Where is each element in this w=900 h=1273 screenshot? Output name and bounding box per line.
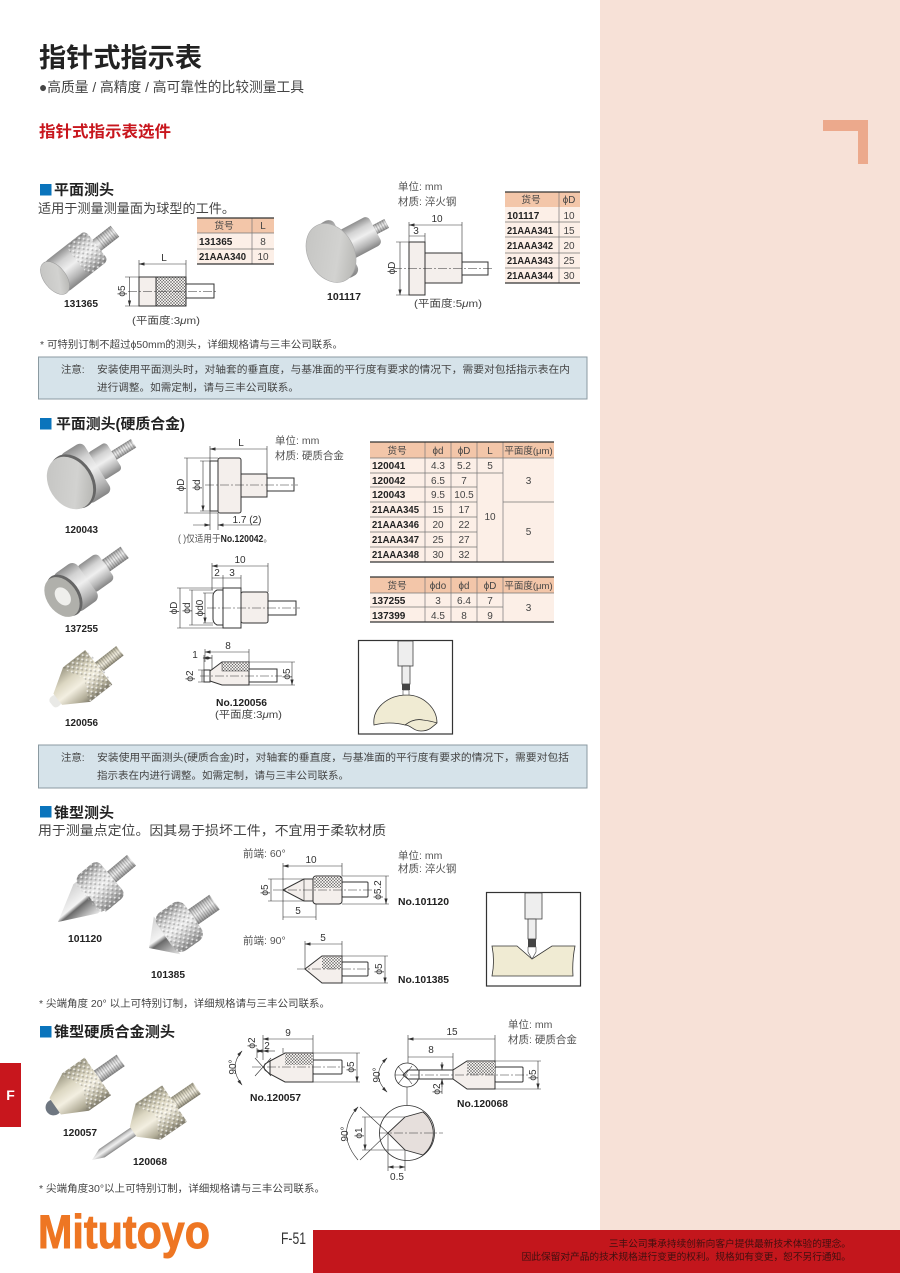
diagram: 120056: ϕ5: [282, 668, 293, 680]
diagram: 137255: 2: [214, 568, 220, 579]
table: 137255: 7: [487, 596, 493, 607]
table: 137255: 平面度(μm): [504, 580, 553, 592]
diagram: 120043: 1.7 (2): [233, 515, 261, 526]
diagram: 101120: 5: [295, 906, 301, 917]
table: carbide flat: 25: [432, 535, 444, 546]
table: 137255: 8: [461, 611, 467, 622]
table: carbide flat: 9.5: [431, 490, 445, 501]
diagram: 101117: [387, 214, 493, 295]
diagram: 120056: ϕ2: [185, 670, 196, 682]
diagram: 120068: ϕ2: [432, 1083, 443, 1095]
diagram: 101117: 10: [431, 214, 443, 225]
diagram: 137255: 10: [234, 555, 246, 566]
table: carbide flat: [370, 442, 554, 562]
unit and material carbide: [275, 434, 344, 462]
diagram: 120056: [185, 641, 295, 685]
table: carbide flat: 5: [526, 527, 532, 538]
table: carbide flat: 10.5: [454, 490, 474, 501]
diagram: tip detail: 90°: [340, 1126, 351, 1142]
unit and material carbide: [508, 1018, 577, 1046]
unit and material: 材质: 淬火钢: [398, 195, 456, 208]
table: 137255: 货号: [387, 579, 407, 592]
page number: F-51: [281, 1229, 306, 1248]
table: 131365: 131365: [199, 237, 233, 248]
table: 101117: 21AAA341: [507, 226, 553, 237]
table: 131365: 21AAA340: [199, 252, 246, 263]
footer band: 三丰公司秉承持续创新向客户提供最新技术体验的理念。: [609, 1237, 851, 1250]
diagram: 120057: 90°: [228, 1059, 239, 1075]
label: 101385: 101385: [151, 970, 185, 981]
diagram: tip detail: 0.5: [390, 1172, 404, 1183]
table: carbide flat: 10: [484, 512, 496, 523]
diagram: 131365: [117, 253, 218, 306]
diagram: 120057: 9: [285, 1028, 291, 1039]
photo: 101120: [43, 843, 146, 940]
label: 101117: 101117: [327, 292, 361, 303]
diagram: 120057: [228, 1028, 360, 1085]
title: 指针式指示表: [39, 43, 202, 73]
note box: 进行调整。如需定制，请与三丰公司联系。: [97, 381, 299, 394]
table: carbide flat: 20: [432, 520, 444, 531]
table: carbide flat: ϕD: [458, 446, 470, 457]
diagram: 120068: ϕ5: [528, 1069, 539, 1081]
flatness note 5um: (平面度:5 μm): [414, 297, 482, 310]
unit and material steel: [398, 849, 456, 875]
diagram: 137255: ϕd: [182, 602, 193, 614]
table: carbide flat: 120042: [372, 476, 406, 487]
label: No.120068: No.120068: [457, 1099, 508, 1110]
table: carbide flat: 22: [458, 520, 470, 531]
label: No.120057: No.120057: [250, 1093, 301, 1104]
corner marker: [823, 120, 868, 164]
label: 120057: 120057: [63, 1128, 97, 1139]
label: 101120: 101120: [68, 934, 102, 945]
diagram: 120057: ϕ5: [346, 1061, 357, 1073]
flatness note: (平面度:3 μm): [215, 708, 282, 721]
table: 101117: 20: [563, 241, 575, 252]
footer logo: Mitutoyo: [38, 1205, 210, 1258]
unit and material carbide: 单位: mm: [275, 434, 320, 447]
table: carbide flat: 32: [458, 550, 470, 561]
note box 2: 注意:: [61, 751, 85, 764]
note box: 注意:: [61, 363, 85, 376]
photo: 120043: [37, 419, 149, 519]
panel: flat contact points: [35, 180, 587, 399]
diagram: 101117: ϕD: [387, 262, 398, 274]
table: 101117: 货号: [521, 193, 541, 206]
illustration: contact on sphere: [358, 640, 452, 734]
table: carbide flat: 6.5: [431, 476, 445, 487]
diagram: 120068: 15: [446, 1027, 458, 1038]
diagram: 101385: 5: [320, 933, 326, 944]
note box 2: 指示表在内进行调整。如需定制，请与三丰公司联系。: [97, 769, 349, 782]
note box: 安装使用平面测头时，对轴套的垂直度，与基准面的平行度有要求的情况下，需要对包括指示表在内: [97, 363, 570, 376]
diagram: 101120: [260, 855, 389, 920]
note box 2: [38, 745, 587, 788]
diagram: 137255: [169, 555, 300, 628]
diagram: 101385: ϕ5: [374, 963, 385, 975]
table: 137255: 6.4: [457, 596, 471, 607]
photo: 131365: [35, 216, 127, 300]
table: 101117: 21AAA344: [507, 271, 553, 282]
photo: 137255: [36, 534, 138, 624]
diagram: 120068: 8: [428, 1045, 434, 1056]
table: 137255: 4.5: [431, 611, 445, 622]
table: carbide flat: 7: [461, 476, 467, 487]
subtitle: ●高质量 / 高精度 / 高可靠性的比较测量工具: [39, 79, 304, 95]
side tab F: F: [6, 1087, 15, 1103]
photo: 120068: [80, 1070, 209, 1178]
heading: cone: 锥型测头: [54, 805, 114, 822]
diagram: 120068: 90°: [372, 1067, 383, 1083]
label: No.120056: No.120056: [216, 698, 267, 709]
table: 101117: ϕD: [563, 195, 575, 206]
diagram: 120057: ϕ2: [247, 1037, 258, 1049]
table: carbide flat: 21AAA347: [372, 535, 419, 546]
label: 131365: 131365: [64, 299, 98, 310]
diagram: 120056: 1: [192, 650, 198, 661]
diagram: 120043: [176, 438, 298, 530]
label: No.101385: No.101385: [398, 975, 449, 986]
footnote: * 尖端角度30°以上可特别订制，详细规格请与三丰公司联系。: [39, 1182, 325, 1195]
label: 120056: 120056: [65, 718, 98, 729]
table: 137255: ϕd: [459, 581, 469, 592]
photo: 120057: [34, 1042, 134, 1131]
table: 137255: 9: [487, 611, 493, 622]
unit and material steel: 单位: mm: [398, 849, 443, 862]
heading: carbide flat: 平面测头(硬质合金): [56, 415, 185, 433]
table: 131365: 8: [260, 237, 266, 248]
section heading: options: 指针式指示表选件: [39, 123, 171, 141]
diagram: 137255: 3: [229, 568, 235, 579]
footnote: * 可特别订制不超过ϕ50mm的测头，详细规格请与三丰公司联系。: [40, 338, 343, 351]
side tab F: [0, 1063, 21, 1127]
table: 131365: L: [260, 221, 266, 232]
label: 120043: 120043: [65, 525, 98, 536]
right page background panel: [600, 0, 900, 1231]
unit and material: 单位: mm: [398, 180, 443, 193]
caption: 90 degree: 前端: 90°: [243, 934, 286, 947]
label: 137255: 137255: [65, 624, 98, 635]
flatness note 3um: (平面度:3 μm): [132, 314, 200, 327]
table: carbide flat: 4.3: [431, 461, 445, 472]
diagram: tip detail: ϕ1: [354, 1127, 365, 1139]
diagram: 101117: 3: [413, 226, 419, 237]
table: 131365: [197, 218, 274, 264]
table: carbide flat: 21AAA348: [372, 550, 419, 561]
panel: cone contact points: [38, 805, 580, 1010]
photo: 120056: [38, 633, 134, 722]
unit and material carbide: 材质: 硬质合金: [275, 449, 344, 462]
table: carbide flat: L: [487, 446, 493, 457]
table: carbide flat: 5.2: [457, 461, 471, 472]
table: carbide flat: 5: [487, 461, 493, 472]
panel: cone carbide contact points: [34, 1018, 577, 1195]
table: 101117: 21AAA342: [507, 241, 553, 252]
diagram: 101120: ϕ5.2: [373, 880, 384, 900]
unit and material: [398, 180, 456, 208]
photo: 101117: [296, 196, 401, 291]
table: carbide flat: 平面度(μm): [504, 445, 553, 457]
note box 2: 安装使用平面测头(硬质合金)时，对轴套的垂直度，与基准面的平行度有要求的情况下，需要对包括: [97, 751, 569, 764]
table: 137255: 3: [526, 603, 532, 614]
table: carbide flat: 17: [458, 505, 470, 516]
illustration: point in groove: [486, 892, 580, 986]
diagram: 120057: 2: [264, 1041, 270, 1052]
table: carbide flat: 120041: [372, 461, 406, 472]
table: 101117: 30: [563, 271, 575, 282]
note: parenthesis: ( )仅适用于No.120042。: [178, 533, 272, 545]
table: 101117: 21AAA343: [507, 256, 553, 267]
table: carbide flat: ϕd: [433, 446, 443, 457]
table: carbide flat: 120043: [372, 490, 406, 501]
label: 120068: 120068: [133, 1157, 167, 1168]
note box: [38, 357, 587, 399]
table: 137255: ϕD: [484, 581, 496, 592]
diagram: 120043: L: [238, 438, 244, 449]
diagram: 131365: ϕ5: [117, 285, 128, 297]
footer band: 因此保留对产品的技术规格进行变更的权利。规格如有变更，恕不另行通知。: [522, 1250, 851, 1263]
footnote: * 尖端角度 20° 以上可特别订制，详细规格请与三丰公司联系。: [39, 997, 330, 1010]
diagram: 137255: ϕD: [169, 602, 180, 614]
diagram: 101120: 10: [305, 855, 317, 866]
arrow: detail zoom: [406, 1087, 408, 1106]
label: No.101120: No.101120: [398, 897, 449, 908]
table: 137255: [370, 577, 554, 622]
table: 101117: 10: [563, 211, 575, 222]
table: carbide flat: 21AAA346: [372, 520, 419, 531]
diagram: 120056: 8: [225, 641, 231, 652]
diagram: 120043: ϕD: [176, 479, 187, 491]
heading: flat contact point: 平面测头: [54, 182, 114, 199]
table: 101117: 25: [563, 256, 575, 267]
diagram: 120043: ϕd: [192, 479, 203, 491]
heading: cone carbide: 锥型硬质合金测头: [54, 1023, 175, 1041]
diagram: tip detail: [340, 1106, 443, 1183]
caption: 60 degree: 前端: 60°: [243, 847, 286, 860]
description: 用于测量点定位。因其易于损坏工件，不宜用于柔软材质: [38, 823, 386, 838]
table: 131365: 10: [257, 252, 269, 263]
table: 137255: 137255: [372, 596, 406, 607]
table: 137255: 3: [435, 596, 441, 607]
description: 适用于测量测量面为球型的工件。: [38, 201, 235, 216]
table: 137255: 137399: [372, 611, 406, 622]
table: carbide flat: 27: [458, 535, 470, 546]
table: carbide flat: 21AAA345: [372, 505, 419, 516]
table: 101117: 101117: [507, 211, 540, 222]
table: 131365: 货号: [214, 219, 234, 232]
table: carbide flat: 货号: [387, 444, 407, 457]
table: 101117: 15: [563, 226, 575, 237]
diagram: 131365: L: [161, 253, 167, 264]
unit and material steel: 材质: 淬火钢: [398, 862, 456, 875]
table: carbide flat: 30: [432, 550, 444, 561]
diagram: 101120: ϕ5: [260, 884, 271, 896]
unit and material carbide: 材质: 硬质合金: [508, 1033, 577, 1046]
photo: 101385: [136, 883, 228, 967]
table: carbide flat: 3: [526, 476, 532, 487]
panel: carbide flat contact points: [36, 415, 587, 788]
table: 137255: ϕdo: [430, 581, 447, 592]
diagram: 101385: [297, 933, 388, 983]
table: 101117: [505, 192, 580, 283]
diagram: 137255: ϕd0: [195, 599, 206, 616]
table: carbide flat: 15: [432, 505, 444, 516]
diagram: 120068: [372, 1027, 541, 1095]
footer band: [313, 1230, 900, 1273]
unit and material carbide: 单位: mm: [508, 1018, 553, 1031]
